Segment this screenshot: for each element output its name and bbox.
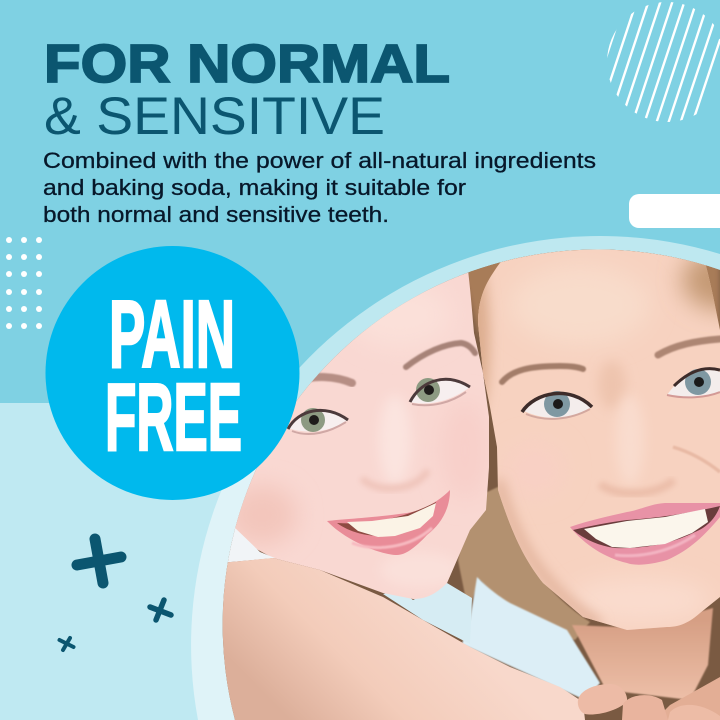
plus icons [60, 539, 171, 650]
woman eyebrows [502, 339, 720, 382]
woman face [462, 245, 720, 635]
girl right eye [410, 378, 470, 405]
girl face [235, 272, 489, 599]
pain free badge: FREE [105, 364, 242, 471]
woman right eye [667, 369, 720, 397]
striped circle decoration [607, 2, 720, 122]
woman mouth [570, 503, 720, 565]
shirt [462, 577, 600, 700]
pain free badge [46, 246, 300, 500]
woman left eye [522, 391, 592, 419]
woman nose shadow [600, 480, 674, 493]
girl sleeve [228, 528, 274, 562]
woman smile line [673, 447, 720, 472]
neck [572, 608, 713, 700]
heading [44, 34, 450, 146]
girl eyebrows [296, 343, 475, 383]
girl nose shadow [362, 470, 428, 488]
white rounded bar [629, 194, 720, 228]
girl mouth [327, 490, 450, 555]
blond hair [458, 486, 590, 640]
arm [220, 558, 585, 720]
hand on arm [578, 677, 720, 720]
heading: & SENSITIVE [44, 87, 385, 146]
girl left eye [288, 408, 348, 434]
body text: Combined with the power of all-natural ingredients [43, 148, 596, 173]
dot grid decoration [6, 237, 42, 329]
body text: both normal and sensitive teeth. [43, 202, 389, 227]
body text [43, 148, 596, 227]
body text: and baking soda, making it suitable for [43, 175, 466, 200]
lower left panel [0, 403, 400, 720]
photo: mother and daughter [220, 245, 720, 720]
pale ring behind photo [191, 236, 720, 720]
top hair [463, 250, 720, 338]
girl collar [383, 583, 472, 644]
heading: FOR NORMAL [44, 34, 450, 94]
pain free badge: PAIN [109, 281, 235, 388]
